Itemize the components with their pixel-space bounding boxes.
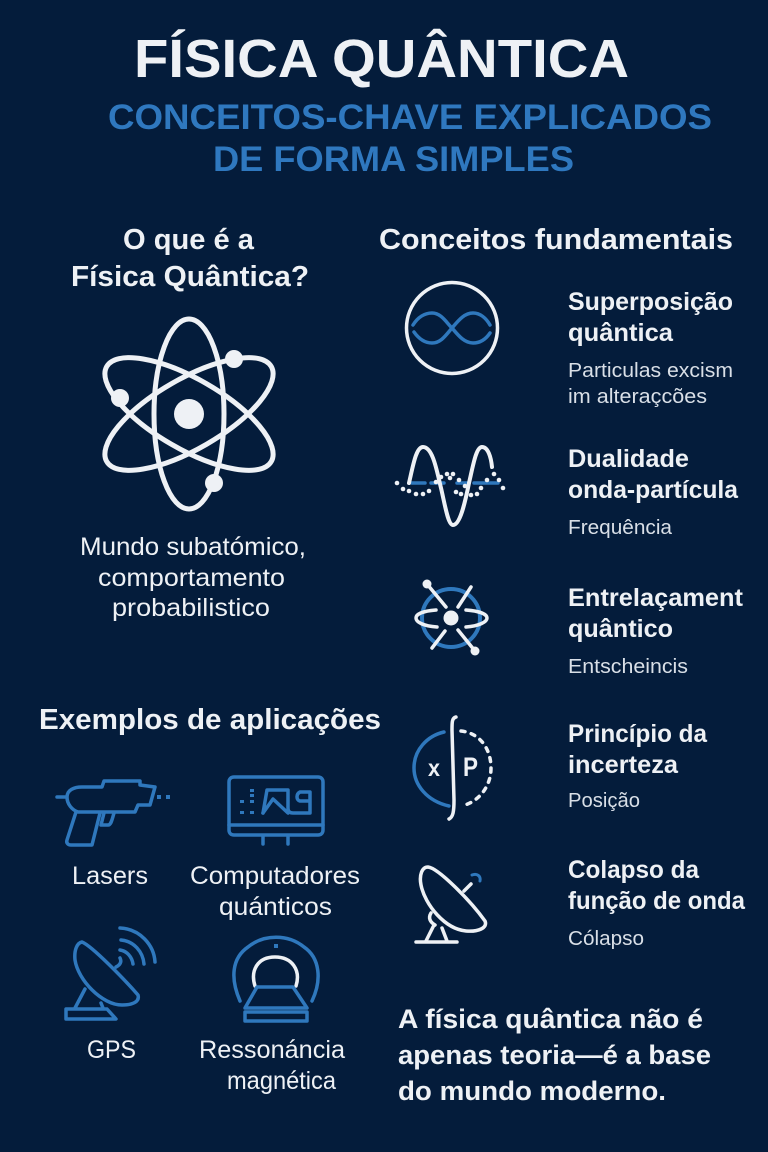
heading: o que é a física quântica <box>71 224 309 293</box>
text: colapso <box>568 856 746 950</box>
label: lasers: Lasers <box>72 862 148 890</box>
concept: colapso <box>416 856 746 950</box>
heading: o que é a física quântica: O que é a <box>123 224 255 256</box>
heading: o que é a física quântica: Física Quântica? <box>71 261 309 293</box>
concept: superposição <box>406 282 733 408</box>
text: entrelaçamento: quântico <box>568 615 673 643</box>
text: entrelaçamento <box>568 584 744 678</box>
text: colapso: função de onda <box>568 887 746 915</box>
text: incerteza: Posição <box>568 790 640 812</box>
subtitle: CONCEITOS-CHAVE EXPLICADOS <box>108 98 712 137</box>
label: ressonância magnética: Ressonáncia <box>199 1036 345 1064</box>
subtitle <box>108 98 712 179</box>
text: colapso: Cólapso <box>568 928 644 950</box>
application: lasers <box>57 781 170 890</box>
icon: satellite dish with signal <box>66 928 155 1019</box>
text: entrelaçamento: Entrelaçament <box>568 584 744 612</box>
closing statement: A física quântica não é <box>398 1004 703 1034</box>
icon: uncertainty: x <box>428 755 440 781</box>
text: superposição: Superposição <box>568 288 733 316</box>
label: computadores quânticos <box>190 862 360 921</box>
application: computadores quânticos <box>190 777 360 921</box>
text: dualidade: Dualidade <box>568 445 689 473</box>
closing statement <box>398 1004 711 1106</box>
text: atom description <box>80 533 306 622</box>
text: colapso: Colapso da <box>568 856 700 884</box>
application: gps <box>66 928 155 1064</box>
text: atom description: Mundo subatómico, <box>80 533 306 561</box>
application: ressonância magnética <box>199 937 345 1095</box>
heading: conceitos fundamentais: Conceitos fundamentais <box>379 224 733 256</box>
closing statement: apenas teoria—é a base <box>398 1040 711 1070</box>
label: ressonância magnética: magnética <box>227 1067 336 1095</box>
text: atom description: probabilistico <box>112 594 270 622</box>
concept: incerteza <box>414 717 708 819</box>
text: dualidade <box>568 445 739 539</box>
text: dualidade: Frequência <box>568 517 673 539</box>
icon: uncertainty <box>414 717 491 819</box>
text: dualidade: onda-partícula <box>568 476 739 504</box>
label: computadores quânticos: quánticos <box>219 893 332 921</box>
icon: wave-particle <box>395 447 505 525</box>
closing statement: do mundo moderno. <box>398 1076 666 1106</box>
icon: atom <box>89 319 289 509</box>
icon: quantum computer <box>229 777 323 844</box>
subtitle: DE FORMA SIMPLES <box>213 140 574 179</box>
icon: uncertainty: P <box>463 752 478 782</box>
icon: entanglement <box>416 580 487 656</box>
label: ressonância magnética <box>199 1036 345 1095</box>
concept: entrelaçamento <box>416 580 744 678</box>
title: FÍSICA QUÂNTICA <box>134 28 629 89</box>
text: superposição: Particulas excism <box>568 360 733 382</box>
heading: exemplos de aplicações: Exemplos de aplicações <box>39 704 381 736</box>
icon: superposition circle <box>406 282 498 374</box>
text: entrelaçamento: Entscheincis <box>568 656 688 678</box>
label: computadores quânticos: Computadores <box>190 862 360 890</box>
text: incerteza: Princípio da <box>568 720 708 748</box>
icon: satellite dish <box>416 867 486 942</box>
icon: mri scanner <box>234 937 318 1021</box>
text: incerteza: incerteza <box>568 751 679 779</box>
icon: laser gun <box>57 781 170 845</box>
text: superposição <box>568 288 733 408</box>
text: incerteza <box>568 720 708 812</box>
text: atom description: comportamento <box>98 564 285 592</box>
label: gps: GPS <box>87 1036 136 1064</box>
text: superposição: im alteraçcões <box>568 386 707 408</box>
text: superposição: quântica <box>568 319 674 347</box>
concept: dualidade <box>395 445 739 539</box>
